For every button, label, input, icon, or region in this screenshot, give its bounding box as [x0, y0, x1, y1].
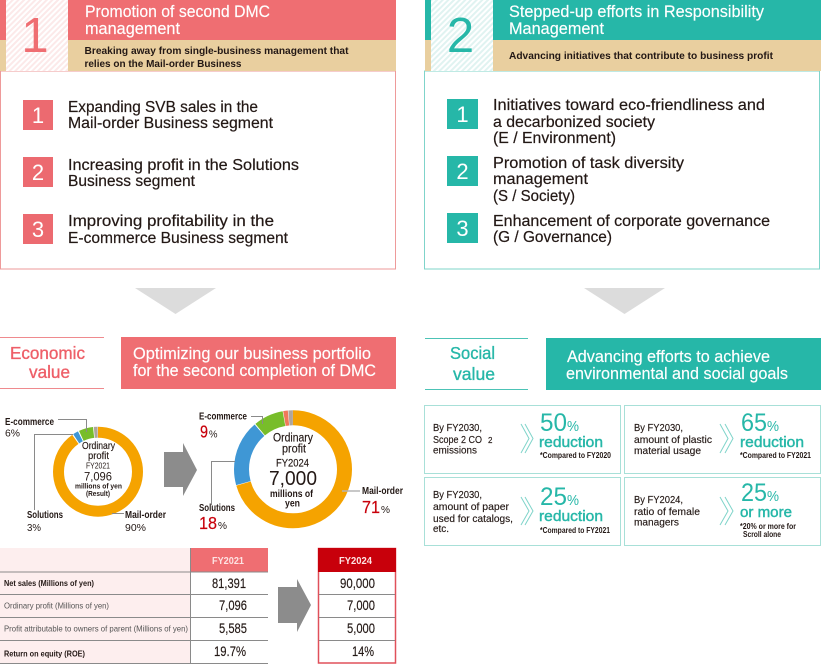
donut centre text FY2021: [75, 440, 122, 498]
label: mail-order 90%: Mail-order: [125, 510, 166, 521]
heading: economic value: [0, 337, 104, 389]
panel: stepped-up efforts in responsibility management: [424, 0, 821, 269]
label: mail-order 90%: 90%: [125, 522, 146, 534]
heading: social value: [425, 338, 528, 390]
panel 2 heading: Management: [509, 20, 604, 38]
item 3: governance: Enhancement of corporate governance: [493, 213, 770, 230]
row: profit attributable to owners: [4, 621, 247, 636]
item 2: Solutions profit: 2: [32, 160, 44, 185]
banner: advancing efforts: environmental and social goals: [566, 365, 788, 383]
card: ratio of female managers: or more: [740, 504, 792, 521]
arrow: down right: [584, 288, 665, 314]
row: ordinary profit: 7,096: [219, 598, 247, 613]
panel 1 subheading: [84, 45, 349, 70]
card: Scope 2 CO2 emissions: emissions: [433, 444, 477, 456]
donut centre text FY2021: Ordinary: [82, 440, 116, 452]
donut centre text FY2021: FY2021: [86, 462, 110, 471]
heading: social value: Social: [450, 343, 495, 363]
card: plastic material usage: %: [767, 418, 779, 435]
row: net sales: [4, 576, 246, 591]
item 3: E-commerce profitability: [23, 213, 289, 247]
banner: advancing efforts: Advancing efforts to achieve: [567, 348, 770, 366]
card: plastic material usage: 65: [741, 409, 767, 437]
row: profit attributable to owners: 5,585: [219, 621, 247, 636]
card: Scope 2 CO2 emissions: 50: [540, 409, 567, 437]
label: solutions 3%: [27, 510, 63, 534]
banner: optimizing business portfolio: [121, 337, 396, 389]
row: return on equity: 19.7%: [214, 644, 246, 659]
table: FY2021 results: [0, 548, 268, 664]
table: FY2024 targets: [318, 548, 396, 663]
leader lines FY2024: [212, 416, 360, 505]
item 3: E-commerce profitability: Improving profitability in the: [68, 213, 274, 230]
banner: optimizing business portfolio: Optimizing our business portfolio: [133, 345, 371, 363]
card: ratio of female managers: managers: [634, 516, 679, 528]
heading: social value: value: [453, 364, 495, 384]
donut centre text FY2024: FY2024: [276, 458, 309, 470]
panel number 1: 1: [21, 9, 49, 63]
card: ratio of female managers: 25: [741, 479, 767, 507]
donut centre text FY2021: 7,096: [84, 470, 112, 484]
item 2: society: (S / Society): [493, 188, 575, 205]
card: Scope 2 CO2 emissions: reduction: [539, 434, 603, 451]
card: plastic material usage: By FY2030,: [634, 422, 683, 434]
icon: chevrons: [521, 497, 533, 525]
row: ordinary profit: [4, 598, 247, 613]
card: paper used for catalogs: reduction: [539, 508, 603, 525]
label: solutions 18%: [199, 503, 235, 533]
panel 1 subheading: Breaking away from single-business management that: [84, 45, 349, 57]
card: paper used for catalogs: etc.: [433, 523, 449, 535]
donut centre text FY2024: yen: [285, 498, 300, 510]
card: plastic material usage: reduction: [740, 434, 804, 451]
card: ratio of female managers: ratio of female: [634, 506, 700, 518]
row: return on equity: Return on equity (ROE): [4, 648, 85, 658]
card: paper used for catalogs: By FY2030,: [433, 489, 482, 501]
item 1: SVB sales: 1: [32, 103, 44, 128]
donut centre text FY2021: millions of yen: [75, 484, 122, 490]
card: Scope 2 CO2 emissions: %: [567, 418, 579, 435]
label: solutions 18%: %: [218, 520, 227, 532]
item 1: SVB sales: Mail-order Business segment: [68, 115, 274, 132]
panel 2 heading: Stepped-up efforts in Responsibility: [509, 3, 765, 21]
label: solutions 18%: Solutions: [199, 503, 235, 514]
icon: chevrons: [720, 497, 733, 525]
item 3: governance: (G / Governance): [493, 229, 612, 246]
label: solutions 3%: Solutions: [27, 510, 63, 521]
target: ordinary profit: 7,000: [347, 598, 375, 613]
card: Scope 2 CO2 emissions: 2: [488, 436, 493, 445]
label: solutions 18%: 18: [199, 513, 217, 533]
item 2: society: 2: [456, 159, 469, 184]
arrow: down left: [135, 288, 216, 314]
item 2: society: management: [493, 171, 589, 188]
card: Scope 2 CO2 emissions: By FY2030,: [433, 422, 482, 434]
donut centre text FY2024: 7,000: [269, 468, 317, 490]
card: ratio of female managers: *20% or more for: [740, 522, 796, 531]
item 2: Solutions profit: [23, 157, 299, 190]
item 3: E-commerce profitability: 3: [32, 217, 44, 242]
label: mail-order 71%: %: [381, 504, 390, 516]
panel 2 subheading: Advancing initiatives that contribute to business profit: [509, 50, 773, 62]
label: e-commerce 9%: %: [209, 429, 218, 441]
arrow: FY2021 to FY2024 donut: [164, 443, 197, 496]
row: ordinary profit: Ordinary profit (Millions of yen): [4, 600, 109, 610]
target: return on equity: 14%: [352, 644, 374, 659]
item 3: governance: [447, 213, 770, 246]
card: plastic material usage: material usage: [634, 445, 701, 457]
card: paper used for catalogs: *Compared to FY2021: [540, 526, 610, 535]
chart: FY2021 ordinary profit donut: [5, 417, 166, 534]
label: e-commerce 6%: [5, 417, 54, 440]
donut centre text FY2024: millions of: [270, 489, 314, 500]
arrow: FY2021 to FY2024 table: [278, 579, 311, 632]
label: e-commerce 9%: E-commerce: [199, 412, 247, 422]
label: e-commerce 6%: E-commerce: [5, 417, 54, 428]
donut centre text FY2021: profit: [88, 450, 109, 462]
item 1: environment: a decarbonized society: [493, 114, 655, 131]
heading: economic value: value: [29, 362, 70, 382]
panel number 2: 2: [447, 9, 474, 63]
card: plastic material usage: *Compared to FY2021: [740, 451, 811, 460]
panel: promotion of second DMC management: [0, 0, 396, 269]
row: net sales: 81,391: [212, 576, 246, 591]
card: plastic material usage: [624, 406, 820, 474]
label: e-commerce 6%: 6%: [5, 428, 20, 440]
card: plastic material usage: amount of plastic: [634, 434, 712, 446]
label: solutions 3%: 3%: [27, 522, 41, 534]
icon: chevrons: [720, 424, 733, 453]
item 3: E-commerce profitability: E-commerce Business segment: [68, 230, 289, 247]
table header FY2021: FY2021: [212, 555, 244, 567]
target: profit attributable: 5,000: [347, 621, 375, 636]
card: Scope 2 CO2 emissions: *Compared to FY2020: [540, 451, 611, 460]
card: ratio of female managers: [624, 478, 820, 546]
card: paper used for catalogs: %: [567, 492, 579, 509]
item 1: environment: [447, 97, 765, 147]
panel 1 subheading: relies on the Mail-order Business: [84, 58, 242, 70]
item 3: governance: 3: [456, 216, 469, 241]
row: net sales: Net sales (Millions of yen): [4, 578, 94, 588]
card: ratio of female managers: By FY2024,: [634, 494, 683, 506]
item 2: society: [447, 155, 684, 205]
item 1: SVB sales: [23, 99, 274, 132]
table header FY2024: FY2024: [339, 555, 372, 567]
donut centre text FY2024: Ordinary: [273, 433, 313, 445]
card: ratio of female managers: %: [767, 488, 779, 505]
label: mail-order 71%: 71: [362, 497, 380, 517]
target: net sales: 90,000: [340, 576, 375, 591]
card: paper used for catalogs: used for catalogs,: [433, 513, 513, 525]
banner: optimizing business portfolio: for the second completion of DMC: [133, 362, 376, 380]
label: mail-order 71%: Mail-order: [362, 486, 403, 497]
donut centre text FY2024: [269, 433, 317, 510]
label: e-commerce 9%: 9: [200, 422, 208, 442]
heading: economic value: Economic: [10, 343, 85, 363]
panel 1 heading: management: [85, 20, 180, 38]
item 2: society: Promotion of task diversity: [493, 155, 684, 172]
panel 1 heading: [85, 3, 270, 38]
card: paper used for catalogs: [424, 478, 620, 546]
item 1: environment: (E / Environment): [493, 130, 616, 147]
label: e-commerce 9%: [199, 412, 247, 442]
panel 1 heading: Promotion of second DMC: [85, 3, 270, 21]
row: return on equity: [4, 644, 246, 659]
row: profit attributable to owners: Profit attributable to owners of parent (Millions of yen): [4, 624, 188, 634]
card: ratio of female managers: Scroll alone: [743, 530, 781, 539]
leader lines FY2021: [34, 420, 124, 514]
item 2: Solutions profit: Business segment: [68, 173, 196, 190]
item 1: SVB sales: Expanding SVB sales in the: [68, 99, 258, 116]
label: mail-order 71%: [362, 486, 403, 517]
label: mail-order 90%: [125, 510, 166, 534]
banner: advancing efforts: [546, 338, 821, 390]
panel 2 heading: [509, 3, 765, 38]
donut centre text FY2021: (Result): [86, 491, 110, 498]
item 1: environment: 1: [456, 102, 469, 127]
donut centre text FY2024: profit: [282, 444, 307, 456]
card: paper used for catalogs: amount of paper: [433, 501, 510, 513]
card: Scope 2 CO2 emissions: Scope 2 CO: [433, 434, 482, 446]
chart: FY2024 ordinary profit donut: [199, 412, 403, 533]
card: Scope 2 CO2 emissions: [424, 406, 620, 474]
item 1: environment: Initiatives toward eco-friendliness and: [493, 97, 765, 114]
card: paper used for catalogs: 25: [540, 483, 567, 511]
icon: chevrons: [521, 424, 533, 453]
item 2: Solutions profit: Increasing profit in the Solutions: [68, 157, 299, 174]
